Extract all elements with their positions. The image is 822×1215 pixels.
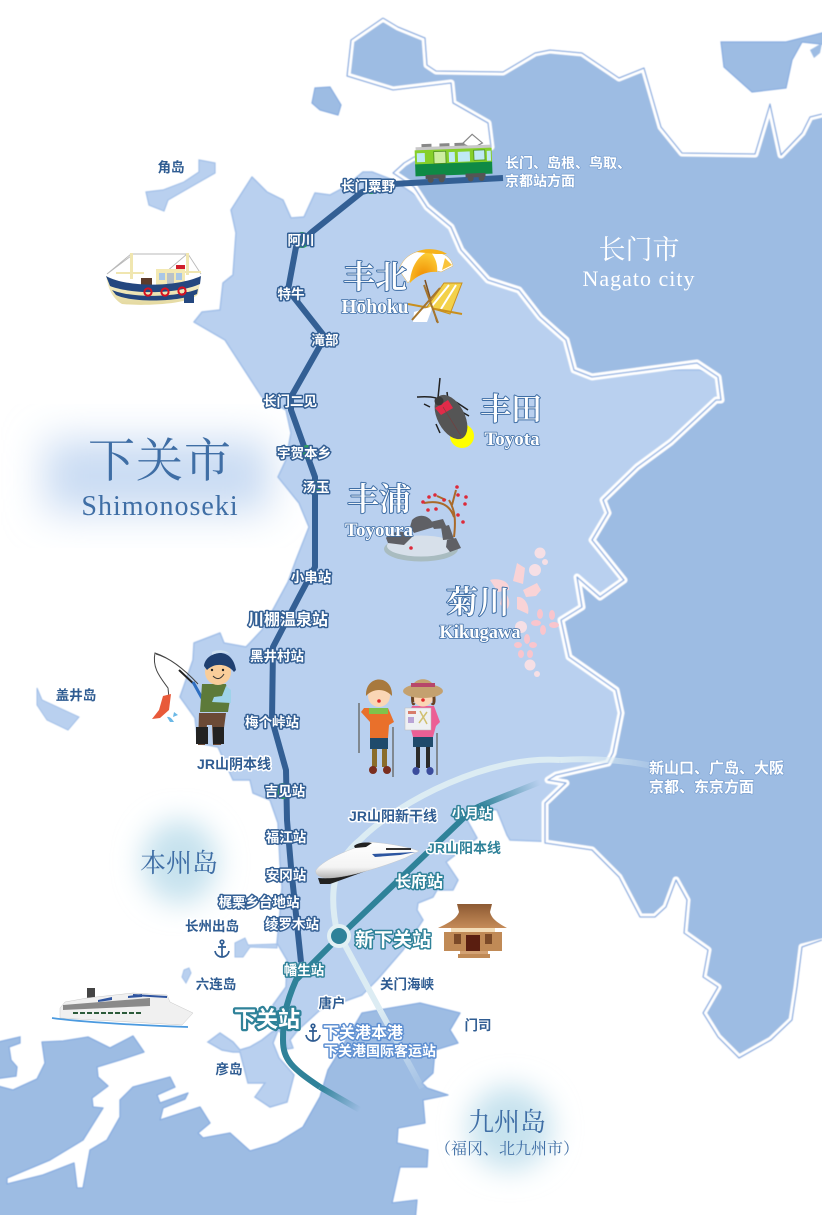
station: Nagato-Futami: 长门二见: [263, 393, 317, 409]
island: Mutsure: [182, 968, 191, 983]
station: Fukue: 福江站: [266, 830, 307, 845]
line: JR Sanyo main line: [283, 782, 540, 1110]
icon: fishing boat: [106, 253, 201, 305]
label: direction Shin-Yamaguchi: 京都、东京方面: [649, 778, 754, 796]
station: Kogushi: 小串站: [291, 569, 332, 585]
panel: Nagato and eastern land: [312, 18, 822, 1058]
region: Kikugawa: Kikugawa: [439, 623, 521, 643]
island: small north: [312, 87, 341, 115]
label: Kanmon Strait: 关门海峡: [380, 976, 434, 992]
title: Nagato city: [582, 235, 696, 291]
label: Mutsure: 六连岛: [196, 976, 236, 992]
label: JR Sanyo line: JR山阳本线: [427, 840, 501, 856]
station: Shin-Shimonoseki: 新下关站: [355, 929, 431, 951]
station: Kottoi: 特牛: [278, 286, 304, 302]
title: Kyushu: [435, 1108, 579, 1158]
place labels: [56, 155, 784, 1077]
label: direction Nagato: 长门、岛根、鸟取、: [505, 155, 631, 171]
station: Yasuoka: 安冈站: [266, 867, 307, 883]
icon: cherry blossoms: [490, 548, 559, 677]
icon: hikers: [359, 679, 443, 777]
label: Hikoshima: 彦岛: [216, 1061, 242, 1077]
title: Honshu: 本州岛: [140, 849, 218, 878]
title: Kyushu: 九州岛: [468, 1108, 546, 1137]
station: Nagato-Awano: 长门粟野: [341, 178, 395, 194]
station: Ozuki: 小月站: [452, 806, 493, 821]
line: JR Sanin main line: [272, 178, 503, 962]
icon: firefly: [417, 378, 474, 448]
station: Yutama: 汤玉: [302, 480, 330, 495]
label: direction Nagato: 京都站方面: [505, 173, 575, 189]
icon: cruise ship: [52, 988, 193, 1027]
island: top right: [721, 31, 822, 92]
region: Kikugawa: 菊川: [446, 584, 510, 620]
island: Hikoshima: [208, 1030, 294, 1107]
label: Futaoi: 盖井岛: [56, 687, 96, 703]
region: Toyoura: [345, 481, 413, 541]
station marker: Shin-Shimonoseki: [327, 924, 351, 948]
region: Hohoku: [341, 259, 409, 318]
label: Moji: 门司: [464, 1017, 492, 1033]
title: Shimonoseki city: [81, 436, 239, 522]
label: Karato: 唐户: [318, 995, 346, 1011]
label: Shimonoseki port: 下关港本港: [323, 1023, 403, 1042]
station: Takibe: 滝部: [312, 332, 339, 348]
label: Tsunoshima: 角岛: [158, 159, 184, 175]
glow: Kyushu label: [468, 1086, 552, 1170]
title: Shimonoseki city: Shimonoseki: [81, 491, 239, 522]
icon: fisherman: [152, 650, 236, 745]
station: Ayaragi: 绫罗木站: [265, 916, 319, 932]
region: Toyota: Toyota: [484, 429, 540, 450]
region: Hohoku: Hōhoku: [341, 297, 409, 318]
station: Shimonoseki: 下关站: [234, 1007, 300, 1032]
station: Kawatana-Onsen: 川棚温泉站: [248, 610, 328, 629]
title: Nagato city: Nagato city: [582, 266, 696, 291]
glow: Shimonoseki title: [45, 440, 270, 512]
station: Kuroimura: 黑井村站: [250, 648, 304, 664]
station: Yoshimi: 吉见站: [265, 784, 306, 799]
panel: Shimonoseki land: [37, 160, 730, 1107]
station: Hatabu: 幡生站: [284, 962, 325, 978]
station labels: [218, 178, 493, 1032]
icon: train: [414, 134, 493, 183]
island: Choshu dejima: [235, 938, 277, 957]
station: Chofu: 长府站: [395, 872, 443, 891]
glow: Honshu label: [142, 820, 218, 904]
label: JR Sanin line: JR山阴本线: [197, 756, 271, 772]
panel: Kyushu land: [0, 1003, 460, 1215]
station: Uka-Hongo: 宇贺本乡: [277, 445, 331, 461]
title: Nagato city: 长门市: [598, 235, 680, 265]
label: JR Sanyo Shinkansen: JR山阳新干线: [349, 808, 437, 824]
icon: beach umbrella and chair: [399, 249, 462, 323]
title: Kyushu: （福冈、北九州市）: [435, 1140, 579, 1158]
region: Toyoura: Toyoura: [345, 520, 413, 541]
region: Toyota: 丰田: [480, 392, 542, 427]
label: Choshu Dejima: 长州出岛: [185, 918, 239, 934]
land: Kyushu west corner: [0, 1037, 20, 1079]
label: international terminal: 下关港国际客运站: [324, 1043, 436, 1059]
icon: anchor Shimonoseki port: [306, 1024, 320, 1041]
island: Futaoi: [37, 688, 79, 730]
region: Toyota: [480, 392, 542, 450]
label: direction Shin-Yamaguchi: 新山口、广岛、大阪: [649, 759, 784, 777]
region: Kikugawa: [439, 584, 521, 643]
station dots: [275, 180, 378, 799]
island: Tsunoshima: [146, 160, 215, 211]
icon: pond and plum tree: [384, 485, 468, 562]
station: Kajikuri-Godaichi: 梶栗乡台地站: [218, 894, 300, 910]
region: Hohoku: 丰北: [343, 259, 407, 295]
station: Umegamine: 梅个峠站: [245, 714, 299, 730]
station: Agawa: 阿川: [288, 233, 314, 248]
island: tiny right: [810, 43, 822, 58]
region: Toyoura: 丰浦: [347, 481, 411, 517]
icon: shinkansen: [316, 842, 419, 884]
icon: anchor Choshu: [215, 940, 229, 957]
icon: temple: [438, 904, 507, 958]
line: JR Sanyo Shinkansen: [333, 759, 660, 1088]
title: Shimonoseki city: 下关市: [88, 436, 232, 488]
